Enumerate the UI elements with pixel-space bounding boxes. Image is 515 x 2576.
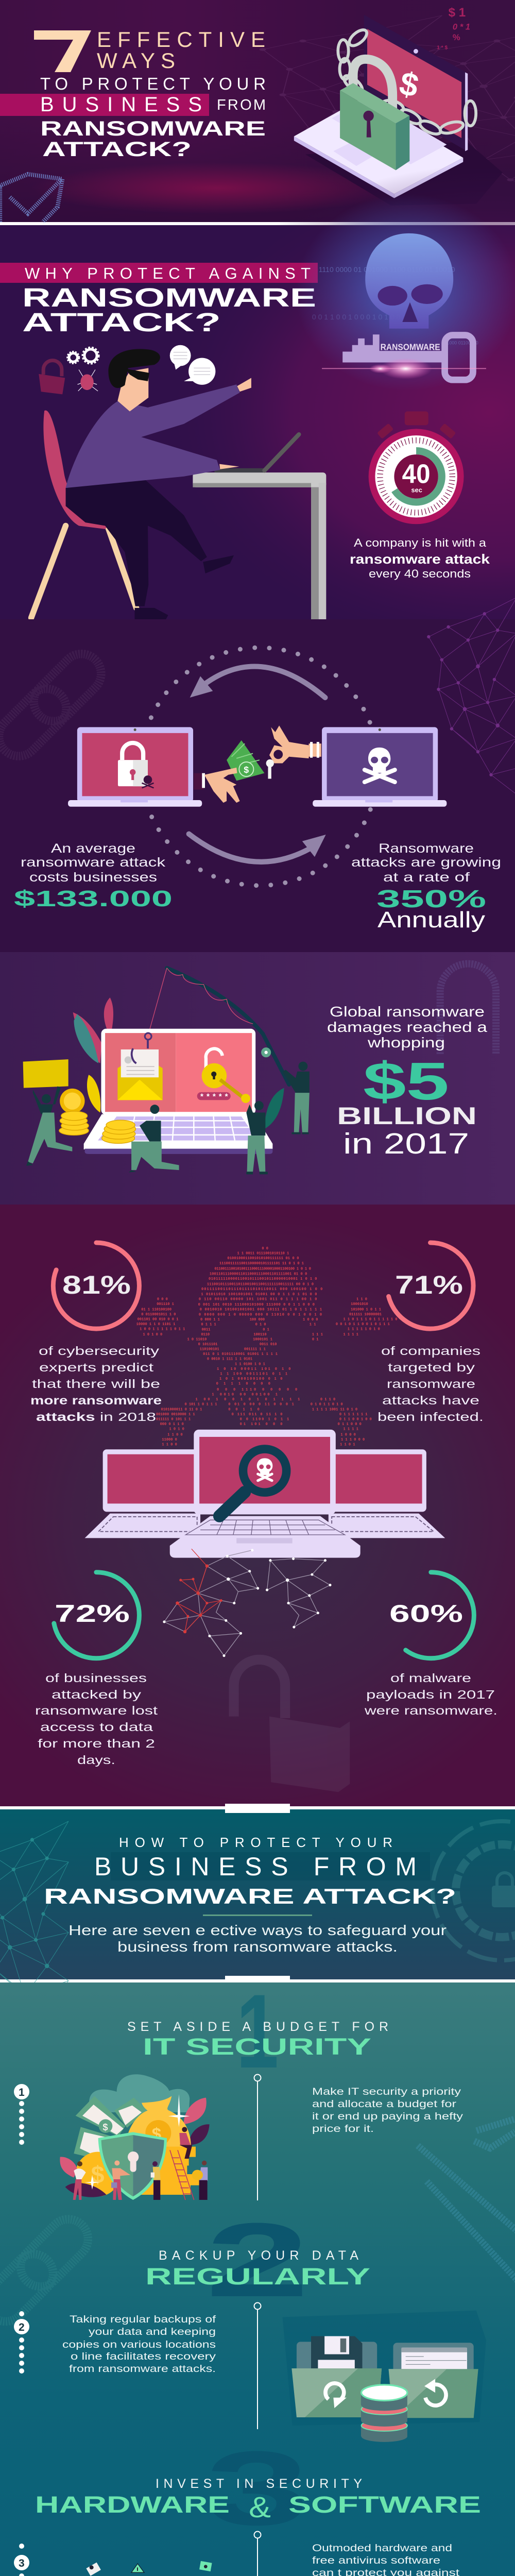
binary skull: 0011 010 bbox=[260, 1343, 277, 1347]
step marker bbox=[14, 2311, 29, 2374]
binary skull: 0 1 1 0 bbox=[320, 1398, 335, 1402]
binary skull: 0 0010 1 111 1 1 0101 bbox=[207, 1358, 252, 1362]
stat: 71%: been infected. bbox=[377, 1410, 484, 1423]
binary skull: 1 1 0 0 bbox=[162, 1443, 177, 1447]
binary skull bbox=[136, 1247, 398, 1447]
title text: ATTACK? bbox=[42, 138, 192, 161]
shield watermark bbox=[0, 1821, 68, 2044]
stat: average cost: $133.000 bbox=[14, 886, 173, 911]
hackers bbox=[26, 1062, 310, 1174]
binary skull: 1 0 1 0 0 bbox=[143, 1333, 162, 1337]
stat: 72%: days. bbox=[77, 1753, 115, 1767]
stopwatch caption: every 40 seconds bbox=[369, 567, 471, 580]
heading bbox=[0, 263, 318, 337]
heading: WHY PROTECT AGAINST bbox=[25, 264, 311, 282]
step marker bbox=[14, 2084, 29, 2145]
binary skull: 1 0 0 0 bbox=[303, 1318, 318, 1322]
binary skull: 0 0 1 0 1 1 0 0 1 0 1 1 1 bbox=[336, 1323, 390, 1327]
title text bbox=[0, 27, 266, 161]
stat: 72%: ransomware lost bbox=[35, 1704, 158, 1717]
binary skull: 001111 1 1 bbox=[244, 1348, 266, 1352]
illustration: ransomware skull and key bbox=[296, 194, 515, 391]
illustration: locked laptop bbox=[294, 6, 503, 206]
binary skull: 011111 0 101 1 1 bbox=[156, 1417, 191, 1421]
stat: growth rate: Ransomware bbox=[379, 841, 474, 856]
binary skull: 1 1 bbox=[310, 1323, 316, 1327]
stat: 72%: attacked by bbox=[52, 1688, 142, 1701]
money and key exchange bbox=[194, 725, 321, 803]
body: from ransomware attacks. bbox=[69, 2363, 216, 2375]
binary skull: 0 0010010 101001001001 000 10111 01 1 0 1 1 1 1 1 bbox=[200, 1308, 322, 1312]
binary skull: 1 0 1 000100100 0 1 0 bbox=[219, 1377, 283, 1381]
stat: 71%: attacks have bbox=[382, 1394, 479, 1407]
step 3 bbox=[14, 2430, 481, 2576]
timeline bbox=[254, 2303, 261, 2429]
binary skull: 0 1011101 bbox=[198, 1343, 217, 1347]
stat: 71%: of companies bbox=[381, 1344, 480, 1358]
arrow: bottom bbox=[189, 834, 326, 862]
illustration: ransomware skull and key: RANSOMWARE bbox=[381, 342, 440, 352]
damages text: BILLION bbox=[337, 1102, 477, 1129]
binary skull: 0100100011001010100111111 01 0 0 bbox=[227, 1257, 299, 1261]
body: Taking regular backups of bbox=[70, 2314, 216, 2325]
binary skull: 0 1 1 1 1 1 1 bbox=[339, 1413, 367, 1417]
binary skull: 100 000 bbox=[250, 1318, 265, 1322]
heading: SET ASIDE A BUDGET FOR bbox=[127, 2020, 388, 2034]
binary skull: 001110 1 bbox=[157, 1302, 174, 1307]
stopwatch: sec bbox=[411, 486, 422, 494]
stat: 81%: of cybersecurity bbox=[39, 1344, 160, 1358]
icon: lock bbox=[39, 361, 65, 394]
binary skull: 1 1 0011 0111001010110 1 bbox=[237, 1251, 289, 1256]
damages text bbox=[327, 1004, 488, 1160]
icon: gears bbox=[67, 347, 99, 364]
binary skull: 001101 00 010 0 0 1 bbox=[138, 1318, 178, 1322]
binary skull: 1 1 0 1 bbox=[340, 1443, 355, 1447]
binary skull: 1 1 1 1 bbox=[344, 1428, 358, 1432]
step marker bbox=[14, 2544, 29, 2576]
title text: BUSINESS bbox=[40, 93, 202, 116]
heading: RANSOMWARE ATTACK? bbox=[44, 1884, 456, 1908]
stat: 72%: for more than 2 bbox=[38, 1737, 155, 1750]
binary skull: 0 1 1 0 0 1 0 0 bbox=[339, 1417, 372, 1421]
lock watermark bbox=[440, 964, 496, 1054]
binary skull: 011111 10000001 bbox=[349, 1313, 382, 1317]
binary skull: 0 1 1 1 bbox=[201, 1323, 216, 1327]
panel: global damages bbox=[0, 952, 515, 1205]
big number 2: 2 bbox=[205, 2201, 310, 2319]
credit card bbox=[23, 1059, 68, 1088]
heading: RANSOMWARE bbox=[22, 283, 316, 312]
body: Make IT security a priority bbox=[312, 2086, 461, 2097]
damages text: $5 bbox=[363, 1052, 449, 1111]
icon: chat bubbles bbox=[170, 345, 215, 385]
binary skull: 0110 bbox=[201, 1333, 210, 1337]
damages text: in 2017 bbox=[343, 1127, 469, 1160]
stat: 81%: more ransomware bbox=[30, 1394, 162, 1407]
binary skull: 1 1 1 1 1 0 1 0 bbox=[348, 1328, 380, 1332]
binary skull: 011001110010100111000111000010001100100 1 0 1 0 bbox=[214, 1267, 311, 1271]
body: Outmoded hardware and bbox=[312, 2543, 452, 2554]
illustration: ransomware skull and key: 0 0 1 1 0 0 1 0 0 0 1 0 1 0 0 1 bbox=[312, 313, 406, 321]
binary skull: 0 1 bbox=[312, 1337, 319, 1342]
binary skull: 000 0 1 1 0 bbox=[160, 1422, 184, 1427]
body: your data and keeping bbox=[89, 2326, 216, 2337]
stat: growth rate bbox=[351, 841, 501, 933]
illustration: ransomware skull and key: 1000 01100010 bbox=[447, 340, 478, 345]
number 7 bbox=[34, 30, 91, 72]
timeline bbox=[254, 2532, 261, 2576]
binary skull: 01 1 110100100 bbox=[141, 1308, 171, 1312]
stat: 60%: 60% bbox=[389, 1600, 463, 1627]
heading: IT SECURITY bbox=[143, 2033, 371, 2060]
binary skull: 0 1 0 1 1 0 1 0 bbox=[311, 1403, 343, 1407]
panel: statistics bbox=[0, 1205, 515, 1829]
stat: 71%: targeted by bbox=[388, 1361, 475, 1374]
binary skull: 0 0 0 1110 0 0 0 0 0 bbox=[217, 1388, 297, 1392]
binary skull: 0 101 1 0 1 1 1 bbox=[184, 1403, 217, 1407]
binary skull: 0 001 101 0010 111000101000 111000 0 0 1 1 0 0 0 bbox=[198, 1303, 315, 1307]
binary skull: 1 1 0 0 bbox=[167, 1433, 183, 1437]
heading: BACKUP YOUR DATA bbox=[159, 2248, 358, 2263]
binary skull: 0 0 1 1 0 bbox=[228, 1408, 260, 1412]
heading: REGULARLY bbox=[145, 2263, 370, 2290]
stat: growth rate: at a rate of bbox=[383, 870, 470, 885]
binary skull: 0011110011011101111010110011 000 100100 1 0 0 bbox=[201, 1287, 322, 1292]
binary skull: 0 110 00110 00000 101 1001 011 0 1 1 1 00 1 0 bbox=[199, 1298, 317, 1302]
binary skull: 0 1 1 0 0 0 bbox=[338, 1422, 362, 1427]
binary skull: 1 1 0100 1 0 1 bbox=[235, 1362, 265, 1366]
panel: cost and growth bbox=[0, 597, 515, 952]
binary skull: 0 1 bbox=[263, 1328, 269, 1332]
body bbox=[312, 2543, 464, 2576]
coins bbox=[59, 1089, 135, 1143]
binary skull: 10001010 bbox=[351, 1302, 368, 1307]
binary skull: 101000 1 0 1 1 bbox=[351, 1308, 381, 1312]
ring: 81% bbox=[53, 1243, 139, 1329]
ring: 60% bbox=[388, 1572, 474, 1658]
binary skull: 1 00 1 0 0 1 0 1 0 1 1 1 1 bbox=[195, 1398, 300, 1402]
binary skull: 1 0 1 0 bbox=[169, 1428, 184, 1432]
body: free antivirus software bbox=[312, 2555, 440, 2566]
binary skull: 1 0 0 0 bbox=[340, 1433, 356, 1437]
binary skull: 1 0 11010 bbox=[187, 1337, 207, 1342]
illustration: locked laptop: % bbox=[453, 32, 460, 42]
icon: spider bbox=[78, 370, 98, 391]
binary skull: 10000 1 1 0 1101 1 bbox=[136, 1323, 175, 1327]
body: and allocate a budget for bbox=[312, 2098, 457, 2110]
binary skull: 1 1 1 bbox=[312, 1333, 323, 1337]
stopwatch bbox=[369, 412, 464, 524]
step 1 bbox=[14, 1973, 463, 2200]
step marker: 3 bbox=[19, 2557, 25, 2569]
stat: 71% bbox=[377, 1270, 484, 1423]
binary skull: 1000101 1 bbox=[253, 1337, 272, 1342]
arrow: top bbox=[190, 667, 325, 698]
binary skull: 0011 bbox=[202, 1328, 210, 1332]
binary skull: 0 0 0 bbox=[157, 1298, 168, 1302]
heading: HARDWARE bbox=[35, 2492, 230, 2518]
stopwatch: 40 bbox=[402, 460, 431, 489]
title text: WAYS bbox=[97, 48, 175, 73]
stat: 72%: of businesses bbox=[45, 1671, 147, 1685]
stat: 81% bbox=[30, 1270, 162, 1423]
binary skull: 011 0 1 0101110001 01001 1 1 1 1 bbox=[203, 1352, 278, 1357]
stat: growth rate: 350% bbox=[376, 886, 486, 913]
binary skull: 001000 0010000 1 1 bbox=[156, 1413, 195, 1417]
stat: 81%: 81% bbox=[62, 1270, 131, 1299]
step marker: 1 bbox=[19, 2087, 25, 2098]
binary skull: 111001011100110110010011001111110011111 00 0 1 0 bbox=[207, 1282, 314, 1286]
damages text: whopping bbox=[367, 1035, 445, 1050]
binary skull: 100110 bbox=[253, 1333, 267, 1337]
illustration: budget shield: $ bbox=[91, 2161, 105, 2188]
heading bbox=[44, 1835, 456, 1955]
body: price for it. bbox=[312, 2123, 374, 2134]
panel: seven steps bbox=[0, 1973, 515, 2576]
step 2 bbox=[14, 2201, 486, 2442]
binary skull: 1 1 1 1 1001 11 0 1 0 bbox=[312, 1408, 357, 1412]
illustration: budget shield: $ bbox=[152, 2125, 162, 2144]
binary skull: 0 000 1 1 bbox=[200, 1318, 220, 1322]
stat: average cost: An average bbox=[51, 841, 135, 856]
body bbox=[62, 2314, 216, 2375]
panel: hero bbox=[0, 0, 515, 225]
lock watermark bbox=[234, 1659, 350, 1792]
binary skull: 0 0 bbox=[262, 1247, 268, 1251]
stat: average cost bbox=[14, 841, 173, 911]
binary skull: 0 0000 000 1 0 00000 000 0 11010 0 0 1 0 0 1 0 bbox=[199, 1313, 322, 1317]
binary skull: 1 1 0 bbox=[356, 1298, 367, 1302]
damages text: damages reached a bbox=[327, 1019, 488, 1035]
heading: BUSINESS FROM bbox=[94, 1852, 417, 1881]
illustration: budget shield: $ bbox=[102, 2122, 108, 2132]
laptop: locked bbox=[68, 727, 202, 807]
binary skull: 1 0 0 1 1 1 1 1 0 1 1 bbox=[140, 1328, 185, 1332]
stat: 71%: ransomware bbox=[387, 1377, 475, 1391]
illustration: locked laptop: $ bbox=[396, 64, 422, 105]
binary skull: 1 0010 00 00100 1 bbox=[212, 1393, 278, 1397]
title text: RANSOMWARE bbox=[40, 117, 266, 140]
stopwatch caption bbox=[350, 536, 490, 580]
ring: 72% bbox=[53, 1572, 139, 1658]
stat: growth rate: attacks are growing bbox=[351, 855, 501, 870]
illustration: budget shield bbox=[60, 2074, 210, 2200]
stat: average cost: costs businesses bbox=[29, 870, 157, 885]
stat: 81%: experts predict bbox=[39, 1361, 154, 1374]
heading: Here are seven e ective ways to safeguard your bbox=[68, 1922, 447, 1938]
lock dial watermark bbox=[433, 1821, 515, 1960]
money and key exchange: $ bbox=[244, 765, 249, 775]
laptop bbox=[214, 434, 299, 472]
chair bbox=[31, 410, 136, 618]
heading: & bbox=[249, 2491, 271, 2524]
stat: 60%: payloads in 2017 bbox=[366, 1688, 495, 1701]
stat: 60% bbox=[364, 1600, 497, 1717]
illustration: hacker at desk bbox=[31, 345, 326, 619]
stopwatch caption: A company is hit with a bbox=[354, 536, 487, 549]
laptop: skull bbox=[313, 727, 447, 807]
world map network backdrop bbox=[260, 15, 515, 197]
binary skull: 1 1 1 0 0 0 bbox=[341, 1438, 365, 1442]
illustration: ransomware skull and key: 1110 0000 01 001000 1100 0110 01 10010 bbox=[319, 265, 455, 274]
body bbox=[312, 2086, 463, 2134]
watermarks bbox=[0, 2119, 515, 2576]
stat: 81%: attacks in 2018 bbox=[36, 1410, 156, 1423]
illustration: locked laptop: 0 * 1 bbox=[453, 22, 470, 31]
binary skull: 1001101110000110110001110001101111001 01 0 0 bbox=[210, 1273, 307, 1277]
illustration: security laptop bbox=[24, 2561, 245, 2576]
panel: why protect bbox=[0, 165, 515, 659]
stopwatch caption: ransomware attack bbox=[350, 551, 490, 567]
body: o line facilitates recovery bbox=[71, 2351, 216, 2362]
binary skull: 11000 0 bbox=[162, 1438, 177, 1442]
illustration: locked laptop: 1 * $ bbox=[437, 45, 448, 51]
heading: business from ransomware attacks. bbox=[117, 1939, 398, 1955]
binary skull: 0 0 1100 1 0 1 1 bbox=[240, 1417, 289, 1421]
stat: 72% bbox=[35, 1600, 158, 1767]
stat: 60%: were ransomware. bbox=[364, 1704, 497, 1717]
dotted ring bbox=[141, 648, 379, 886]
heading bbox=[35, 2477, 481, 2524]
heading: SOFTWARE bbox=[288, 2492, 481, 2518]
body: copies on various locations bbox=[62, 2339, 216, 2350]
title text: TO PROTECT YOUR bbox=[40, 74, 266, 93]
stat: growth rate: Annually bbox=[377, 907, 485, 933]
binary skull: 1110011111001100000101111101 11 0 1 0 1 bbox=[219, 1262, 304, 1266]
binary skull: 0101000011 0 11 0 1 bbox=[161, 1408, 202, 1412]
binary skull: 1 1 1 1 bbox=[344, 1333, 358, 1337]
heading: ATTACK? bbox=[22, 308, 221, 337]
body: it or end up paying a hefty bbox=[312, 2111, 463, 2122]
binary skull: 1 01011010 1001001001 01001 00 0 1 1 0 1 01 0 0 bbox=[201, 1293, 317, 1297]
heading: HOW TO PROTECT YOUR bbox=[119, 1835, 392, 1850]
binary skull: 110100101 bbox=[200, 1348, 219, 1352]
illustration: phishing laptop bbox=[23, 968, 310, 1174]
binary skull: 0 0110001011 1 0 bbox=[141, 1313, 176, 1317]
binary skull: 0 111 011 0 11 1 0 bbox=[232, 1413, 283, 1417]
timeline bbox=[254, 2074, 261, 2200]
desk bbox=[193, 472, 326, 619]
heading bbox=[127, 2020, 388, 2060]
hacker bbox=[66, 349, 251, 619]
panel: how to protect header bbox=[0, 1804, 515, 2044]
binary skull: 0 01 0 00 0 11 0 0 0 1 bbox=[228, 1403, 294, 1407]
illustration: backup folders bbox=[283, 2311, 486, 2442]
ring: 71% bbox=[387, 1243, 473, 1329]
illustration: infected laptops bbox=[85, 1430, 445, 1558]
shield watermark bbox=[427, 597, 515, 794]
binary skull: 1 0 10 00011 101 0 1 0 bbox=[217, 1367, 290, 1371]
step marker: 2 bbox=[19, 2321, 25, 2333]
title text: EFFECTIVE bbox=[97, 27, 265, 52]
damages text: Global ransomware bbox=[330, 1004, 485, 1020]
heading bbox=[145, 2248, 370, 2290]
stat: 72%: access to data bbox=[40, 1720, 153, 1734]
binary skull: 1 1 100 0011101 0 1 1 bbox=[220, 1372, 287, 1376]
stat: average cost: ransomware attack bbox=[21, 855, 166, 870]
binary skull: 1 1 0 1 1 1 0 1 1 1 1 1 0 bbox=[344, 1318, 398, 1322]
title text: FROM bbox=[217, 97, 266, 113]
stat: 71%: 71% bbox=[395, 1270, 463, 1299]
binary skull: 0 1 0 bbox=[255, 1323, 266, 1327]
binary skull: 0101111100001100101110010110000010001 1 0 1 0 bbox=[209, 1277, 317, 1281]
stat: 81%: that there will be bbox=[32, 1377, 160, 1391]
heading: INVEST IN SECURITY bbox=[156, 2477, 362, 2491]
illustration: phishing laptop: ***** bbox=[200, 1092, 228, 1101]
network graphic bbox=[163, 1549, 332, 1657]
chain watermark bbox=[0, 646, 109, 764]
big number 1: 1 bbox=[236, 1973, 279, 2090]
binary skull: 01 101 0 0 0 bbox=[240, 1422, 283, 1427]
stat: 60%: of malware bbox=[390, 1671, 471, 1685]
stat: 72%: 72% bbox=[55, 1600, 130, 1627]
illustration: locked laptop: $ 1 bbox=[449, 6, 466, 20]
binary skull: 0 1 1 1 0 0 0 0 bbox=[216, 1382, 270, 1386]
big number 3: 3 bbox=[205, 2430, 310, 2547]
glowing shield bbox=[0, 174, 62, 222]
